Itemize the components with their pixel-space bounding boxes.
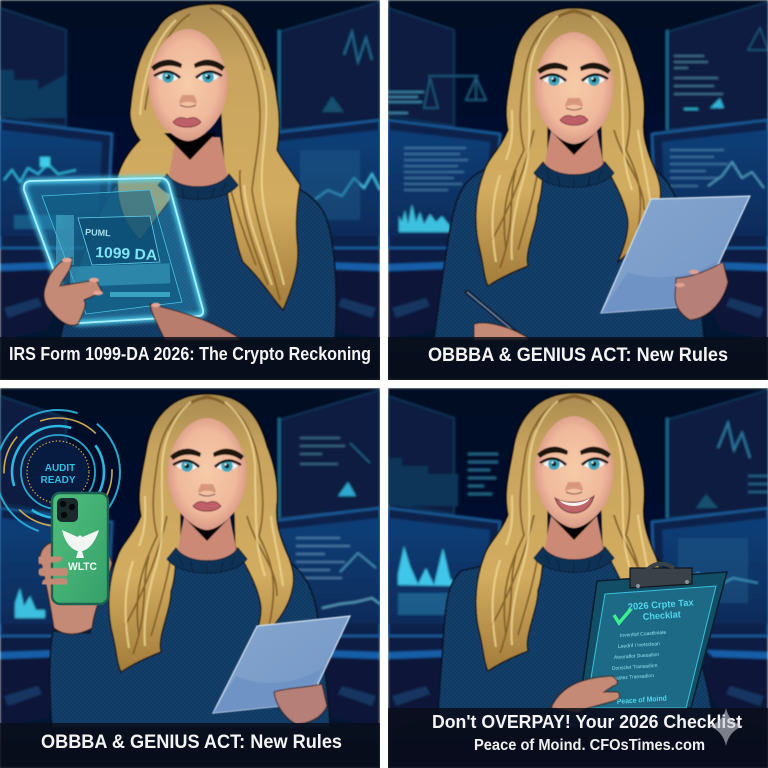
figure: woman smiling — [438, 393, 713, 728]
panel: 2026 checklist — [388, 388, 768, 768]
caption bar — [388, 337, 768, 380]
sheet of paper and hand — [601, 196, 750, 320]
clipboard with checklist: Donsclet Transadion — [612, 663, 658, 672]
icon: green check — [614, 609, 631, 623]
audit ready rings: AUDIT — [45, 463, 75, 474]
clipboard with checklist: Checklat — [642, 609, 682, 623]
phone with WLTC eagle — [52, 493, 108, 604]
figure: woman front-facing — [434, 8, 704, 340]
clipboard with checklist: 2026 Crpte Tax — [627, 597, 695, 613]
hand holding clipboard — [551, 676, 620, 713]
phone with WLTC eagle: WLTC — [68, 561, 97, 573]
hologram tablet reading 1099 DA: PUML — [85, 227, 111, 238]
icon: sparkle star — [709, 708, 743, 746]
caption bar: Peace of Moind. CFOsTimes.com — [474, 737, 705, 754]
panel: OBBBA and GENIUS Act with phone — [0, 388, 380, 768]
fingers on phone — [40, 558, 66, 583]
caption bar: Don't OVERPAY! Your 2026 Checklist — [432, 711, 742, 732]
background: charts and data screens — [388, 388, 768, 768]
clipboard with checklist — [579, 564, 727, 708]
caption bar — [388, 708, 768, 768]
clipboard with checklist: Leedrif I Ivetsclean — [618, 641, 660, 650]
caption bar — [0, 337, 380, 380]
caption bar: OBBBA & GENIUS ACT: New Rules — [41, 732, 342, 753]
background: monitors and data screens — [0, 0, 380, 380]
pen and writing hand — [467, 292, 528, 340]
sheet of paper and hand — [213, 616, 350, 724]
caption bar — [0, 723, 380, 768]
hand holding phone — [40, 543, 112, 634]
clipboard with checklist: Boastez Transadion — [610, 673, 654, 682]
background: legal scales and code screens — [388, 0, 768, 380]
clipboard with checklist: Peace of Moind — [617, 694, 667, 706]
audit ready rings: READY — [40, 475, 76, 486]
caption bar: IRS Form 1099-DA 2026: The Crypto Reckoning — [9, 344, 371, 364]
smile teeth — [559, 498, 590, 506]
audit ready rings — [0, 410, 120, 534]
clipboard with checklist: Inventlof Coastliniate — [620, 630, 667, 639]
clipboard with checklist: Atooraflot Duesation — [614, 652, 660, 661]
figure: woman front-facing — [50, 394, 330, 728]
figure: woman looking up — [60, 4, 336, 340]
smile — [555, 496, 594, 513]
background: code and chart screens — [0, 388, 380, 768]
panel: IRS Form 1099-DA — [0, 0, 380, 380]
caption bar: OBBBA & GENIUS ACT: New Rules — [428, 345, 728, 366]
hands holding the tablet — [44, 258, 240, 340]
panel: OBBBA and GENIUS Act with pen — [388, 0, 768, 380]
hologram tablet reading 1099 DA: 1099 DA — [95, 244, 158, 264]
hologram tablet reading 1099 DA — [24, 178, 203, 323]
